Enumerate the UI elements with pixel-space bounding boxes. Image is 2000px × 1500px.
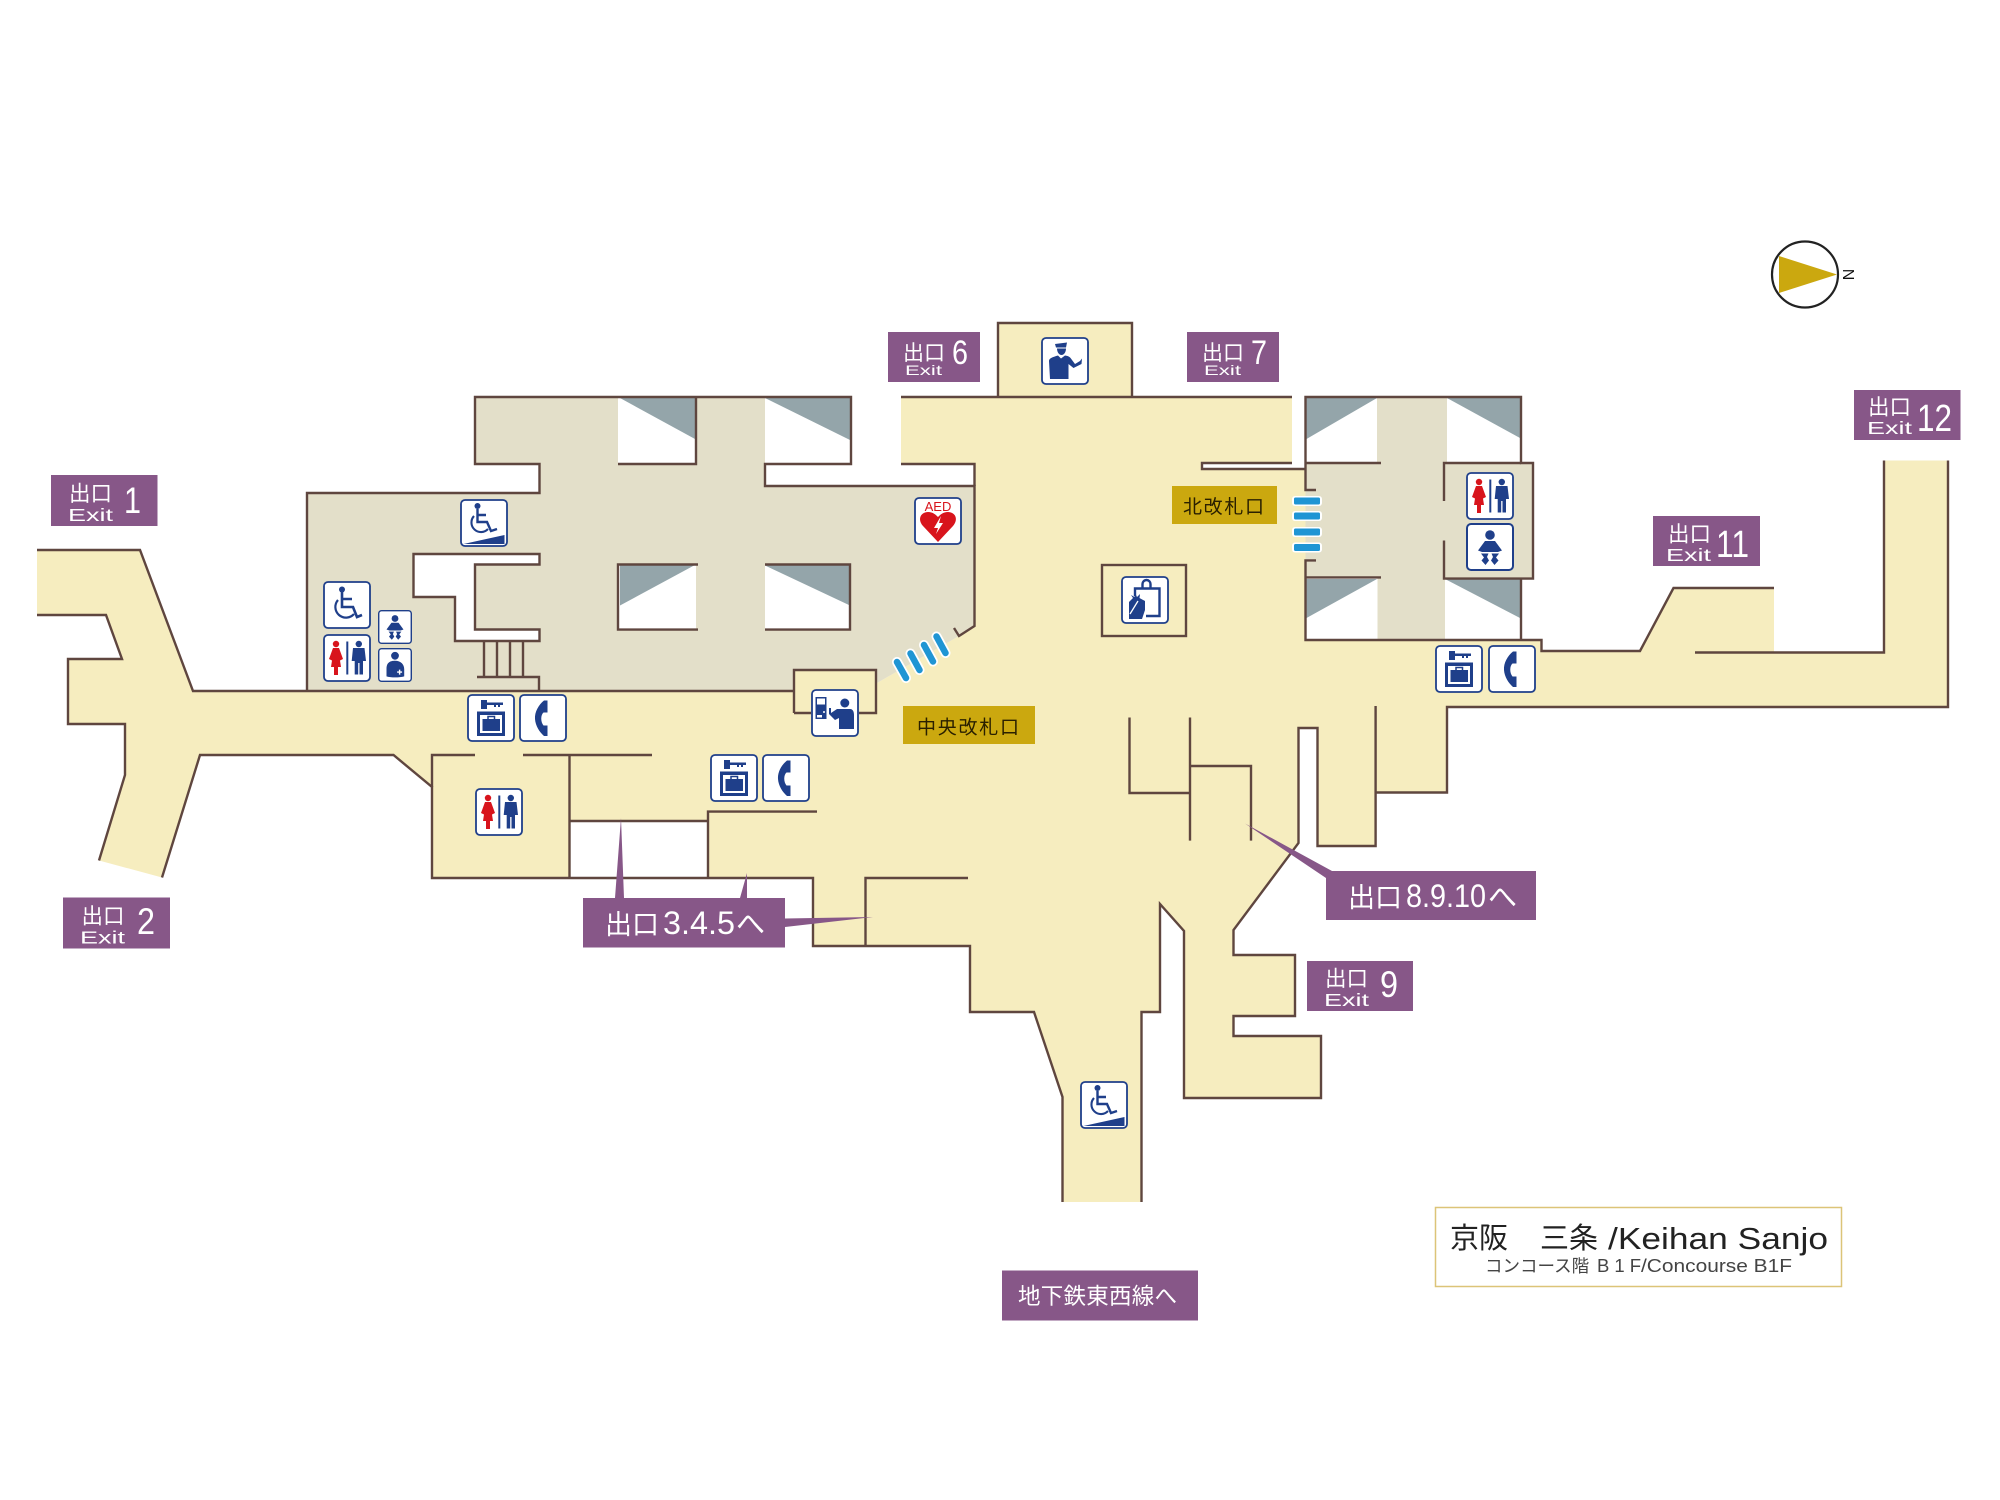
icon: telephone west	[520, 695, 566, 741]
exit 9 label: 9	[1380, 964, 1398, 1005]
floor: east gray area	[1306, 397, 1533, 640]
gate label: north	[1172, 486, 1277, 524]
walls	[37, 323, 1948, 1202]
exit 11 label	[1653, 516, 1760, 566]
exit 12 label: Exit	[1867, 418, 1912, 438]
void: west upper right	[765, 397, 851, 464]
exit 2 label: Exit	[80, 928, 125, 948]
exit 7 label: 出口	[1202, 342, 1244, 365]
void: west upper left	[618, 397, 696, 464]
exit 9 label: 出口	[1325, 967, 1368, 991]
icon: ramp south	[1081, 1082, 1127, 1128]
void: stair well	[414, 554, 540, 641]
icon: AED	[915, 498, 961, 544]
exit 12 label: 12	[1917, 398, 1952, 440]
exit 6 label: 6	[952, 334, 968, 372]
exit 9 label: Exit	[1324, 990, 1369, 1010]
icon: coin locker centre	[711, 755, 757, 801]
icon: restrooms east	[1467, 473, 1513, 519]
exit 7 label: 7	[1251, 334, 1267, 372]
callout: to Tozai subway line: 地下鉄東西線へ	[1018, 1284, 1177, 1309]
compass	[1772, 242, 1856, 308]
icon: baby care east	[1467, 524, 1513, 570]
icon: first aid room	[379, 649, 411, 681]
callout: exits 3,4,5	[583, 818, 873, 948]
exit 2 label	[63, 898, 170, 948]
floor: cream concourse	[37, 323, 1948, 1202]
exit 12 label	[1854, 390, 1960, 440]
turnstiles: north gate	[1292, 496, 1322, 552]
icon: station officer	[1042, 338, 1088, 384]
title box: /Concourse B1F	[1641, 1255, 1792, 1276]
exit 12 label: 出口	[1868, 396, 1911, 420]
title box: コンコース階	[1485, 1256, 1589, 1276]
void: east lower left	[1306, 578, 1378, 640]
icon: wheelchair toilet	[324, 582, 370, 628]
exit 1 label: 出口	[69, 482, 112, 506]
exit 7 label	[1187, 332, 1279, 382]
icon: baby care west	[379, 611, 411, 643]
gate label: central	[903, 706, 1035, 744]
void: east upper right	[1447, 397, 1521, 463]
title box: B1F	[1597, 1255, 1641, 1276]
exit 11 label: 11	[1716, 524, 1749, 566]
void: west lower right	[765, 564, 850, 630]
exit 6 label: Exit	[905, 362, 942, 378]
exit 1 label	[51, 475, 158, 526]
compass: N	[1839, 269, 1856, 280]
callout: exits 3,4,5: 3.4.5	[663, 905, 735, 941]
icon: coin locker east	[1436, 646, 1482, 692]
icon: station staff counter	[812, 690, 858, 736]
callout: exits 8,9,10: 出口	[1348, 883, 1402, 913]
callout: exits 3,4,5: へ	[736, 909, 765, 941]
callout: exits 8,9,10: 8.9.10	[1406, 878, 1486, 914]
callout: exits 8,9,10: へ	[1488, 882, 1517, 914]
exit 1 label: Exit	[68, 505, 113, 525]
void: west lower left	[618, 564, 696, 630]
void: east upper left	[1306, 397, 1377, 463]
exit 7 label: Exit	[1204, 362, 1241, 378]
exit 1 label: 1	[124, 480, 141, 521]
exit 9 label	[1307, 961, 1413, 1011]
title box: /Keihan Sanjo	[1608, 1221, 1828, 1256]
title box	[1436, 1208, 1842, 1286]
title box: 三条	[1540, 1222, 1598, 1255]
icon: AED: AED	[925, 499, 951, 514]
callout: exits 8,9,10	[1245, 824, 1536, 920]
icon: telephone east	[1489, 646, 1535, 692]
exit 2 label: 出口	[82, 904, 125, 928]
icon: restrooms south	[476, 789, 522, 835]
exit 2 label: 2	[137, 901, 155, 942]
gate label: north: 北改札口	[1183, 496, 1264, 518]
icon: coin locker west	[468, 695, 514, 741]
icon: telephone centre	[763, 755, 809, 801]
turnstiles: central gate	[897, 636, 946, 678]
title box: 京阪	[1450, 1223, 1508, 1255]
callout: to Tozai subway line	[1002, 1270, 1198, 1320]
exit 11 label: Exit	[1666, 545, 1711, 565]
icon: shop	[1122, 577, 1168, 623]
exit 11 label: 出口	[1668, 522, 1711, 546]
icon: ramp west	[461, 500, 507, 546]
floor: west gray area	[307, 397, 975, 691]
void: east lower right	[1445, 578, 1521, 640]
exit 6 label	[888, 332, 980, 382]
exit 6 label: 出口	[903, 342, 945, 365]
icon: restrooms west	[324, 635, 370, 681]
callout: exits 3,4,5: 出口	[605, 910, 659, 940]
gate label: central: 中央改札口	[917, 716, 1019, 738]
